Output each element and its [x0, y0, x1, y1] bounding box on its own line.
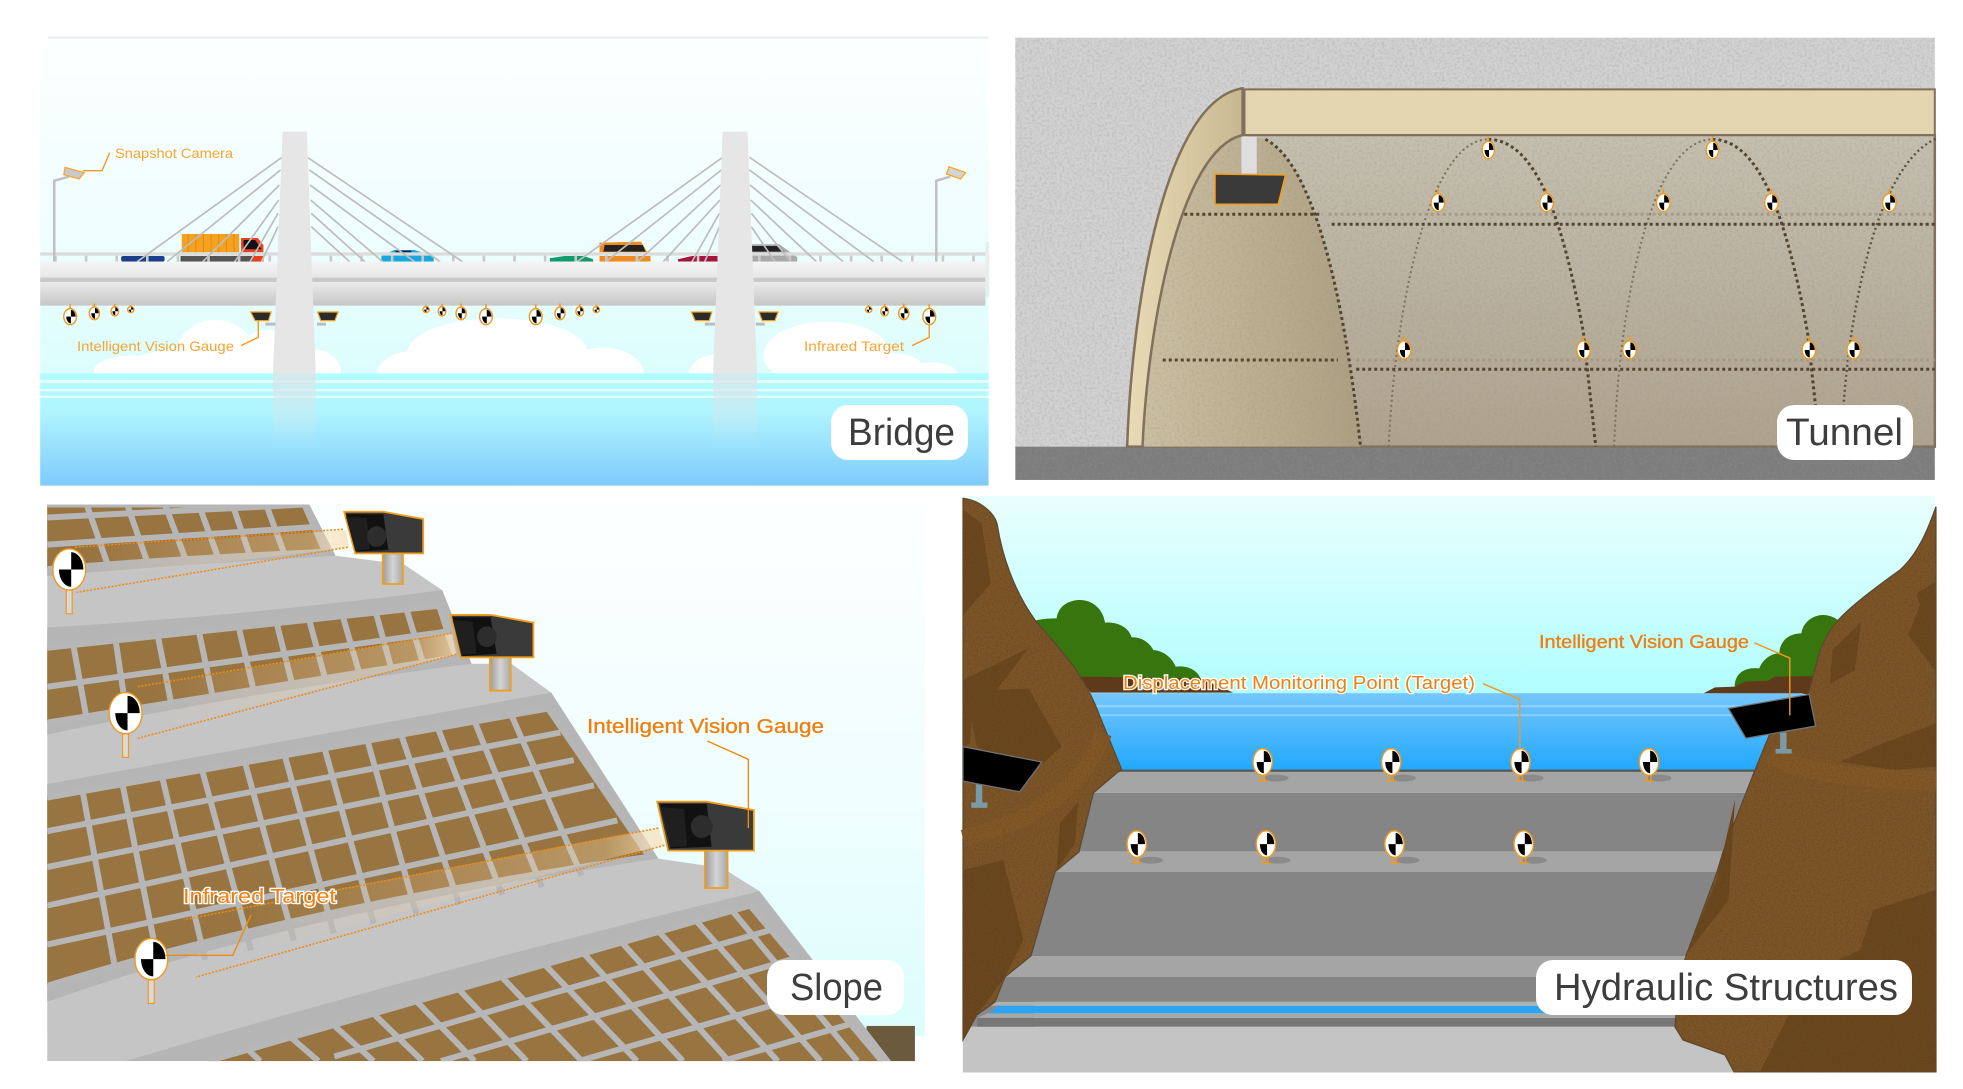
caption: slope — [767, 960, 904, 1015]
leader lines — [165, 741, 748, 955]
lower grid — [47, 709, 649, 986]
pylon reflections — [273, 373, 757, 445]
middle grid — [47, 606, 456, 723]
berms — [47, 505, 891, 1061]
monitoring rows — [1163, 214, 1935, 369]
panel: bridge — [40, 36, 989, 486]
tunnel lining ring — [1127, 88, 1243, 447]
water ripples — [40, 380, 989, 398]
caption: tunnel: Tunnel — [1786, 412, 1903, 454]
spillway backing — [969, 977, 1034, 1027]
stay cables — [137, 157, 902, 262]
sky — [963, 496, 1935, 700]
ceiling band — [1244, 89, 1935, 135]
upper grid — [47, 505, 326, 569]
caption: slope: Slope — [790, 967, 883, 1009]
right shore — [1703, 615, 1840, 694]
leader lines — [1483, 643, 1790, 750]
first bay — [1142, 135, 1361, 447]
dam steps — [977, 770, 1758, 1027]
light beams — [73, 529, 664, 977]
sky — [40, 36, 989, 374]
water — [40, 373, 989, 486]
label: infrared target: Infrared Target — [183, 886, 337, 908]
slope bands — [47, 505, 891, 1061]
sky — [47, 505, 925, 1036]
label: intelligent vision gauge: Intelligent Vision Gauge — [1539, 632, 1749, 652]
railing — [40, 252, 985, 259]
road — [1015, 447, 1935, 480]
wall and road texture — [1015, 38, 1935, 480]
infrared targets — [53, 549, 168, 1003]
panel: tunnel — [1015, 38, 1937, 480]
caption: tunnel — [1777, 405, 1913, 460]
panel: hydraulic structures — [963, 496, 1936, 1073]
vehicles — [121, 234, 797, 262]
label: snapshot camera: Snapshot Camera — [115, 145, 233, 161]
leader lines — [83, 153, 929, 346]
vision gauges under deck — [251, 312, 778, 326]
lamp posts with snapshot cameras — [54, 167, 966, 262]
infrared targets under deck — [64, 303, 936, 325]
label: intelligent vision gauge: Intelligent Vision Gauge — [77, 338, 234, 354]
displacement targets — [1127, 749, 1672, 864]
clouds — [94, 318, 958, 402]
water ripples — [1089, 705, 1767, 716]
ground — [963, 1027, 1735, 1073]
gauge cameras — [344, 512, 754, 888]
label: intelligent vision gauge: Intelligent Vision Gauge — [587, 716, 824, 738]
vision gauge camera — [1215, 137, 1286, 204]
caption: hydraulic structures: Hydraulic Structures — [1554, 967, 1898, 1009]
bridge deck — [40, 242, 989, 306]
rock wall — [1015, 38, 1935, 447]
bridge pylons — [273, 132, 757, 373]
caption: bridge — [831, 405, 968, 460]
caption: hydraulic structures — [1536, 960, 1912, 1015]
tunnel interior — [1142, 135, 1935, 447]
ground — [867, 1026, 915, 1061]
monitoring arches — [1265, 138, 1937, 447]
reservoir water — [1079, 693, 1803, 772]
top ledge — [48, 36, 989, 39]
left rock — [963, 498, 1122, 1040]
infrared targets — [1397, 137, 1896, 359]
panel: slope — [47, 505, 925, 1061]
right rock — [1675, 507, 1936, 1072]
label: displacement monitoring point: Displacement Monitoring Point (Target) — [1123, 673, 1475, 693]
label: infrared target: Infrared Target — [804, 338, 904, 354]
gauge cameras — [963, 694, 1816, 808]
caption: bridge: Bridge — [848, 412, 955, 454]
bottom grid — [208, 906, 882, 1061]
left shore — [1035, 600, 1233, 693]
